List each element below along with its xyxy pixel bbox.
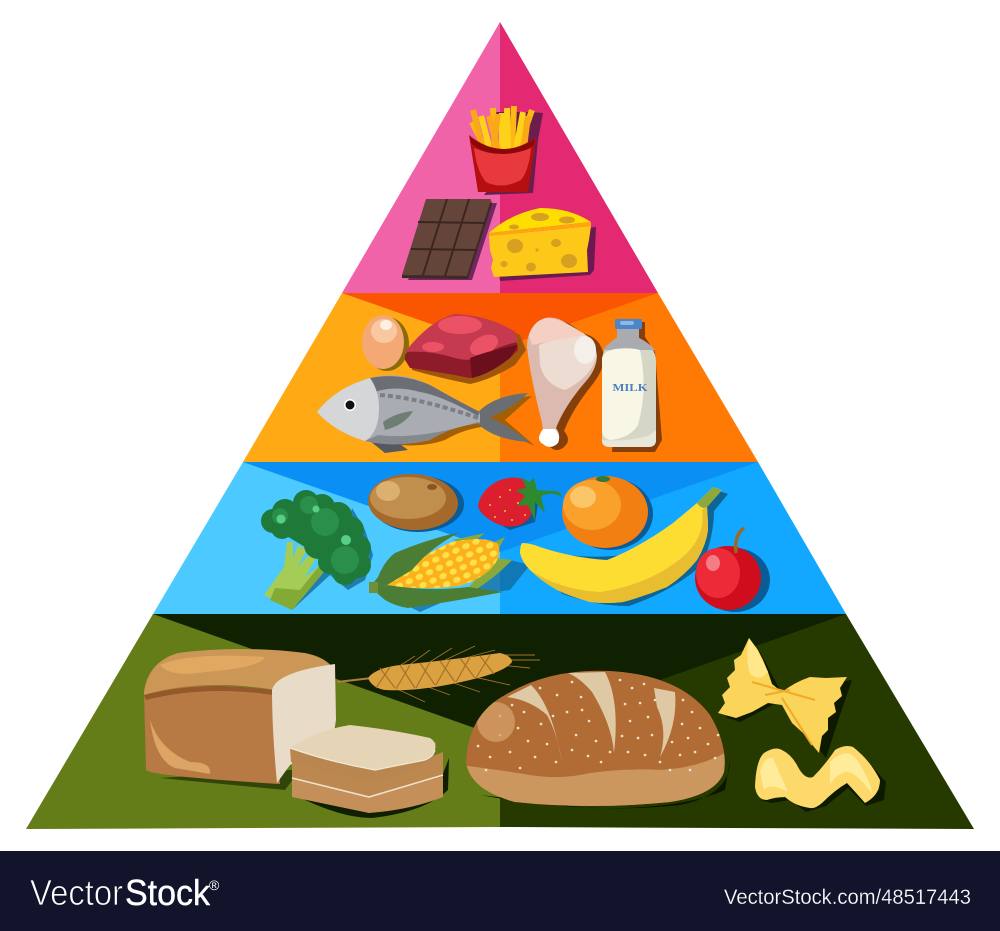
tier 4: grains (green) [26,614,974,829]
tier 2: protein and dairy (orange) [243,293,758,462]
icon: red meat steak [405,314,526,384]
icon: cheese wedge [489,208,596,281]
icon: strawberry [478,477,562,530]
footer logo: Vector [30,872,123,913]
icon: wheat ear [337,646,540,702]
icon: farfalle pasta [718,638,852,758]
icon: chocolate bar [402,199,497,280]
icon: apple [695,528,770,612]
footer logo: ® [209,877,220,893]
icon: french fries [469,106,543,195]
label: milk: MILK [612,383,648,394]
icon: potato [367,472,464,532]
icon: stacked bread slices [290,725,449,818]
tier 1: treats and fats (pink) [342,22,658,293]
icon: corn cob [369,532,530,612]
icon: banana [520,487,728,606]
footer image url: VectorStock.com/48517443 [724,886,971,909]
icon: chicken drumstick [527,318,604,450]
footer logo: Stock [125,872,211,913]
icon: loaf of sliced bread [144,649,336,790]
icon: round artisan loaf [460,671,730,815]
footer logo [30,872,220,913]
icon: broccoli [261,490,373,610]
icon: milk bottle [602,319,662,452]
icon: fish [317,375,535,453]
tier 3: fruit and vegetables (blue) [153,462,846,614]
icon: egg [362,315,409,371]
icon: wavy pasta [755,746,886,812]
footer bar [0,851,1000,931]
icon: orange [562,476,653,550]
